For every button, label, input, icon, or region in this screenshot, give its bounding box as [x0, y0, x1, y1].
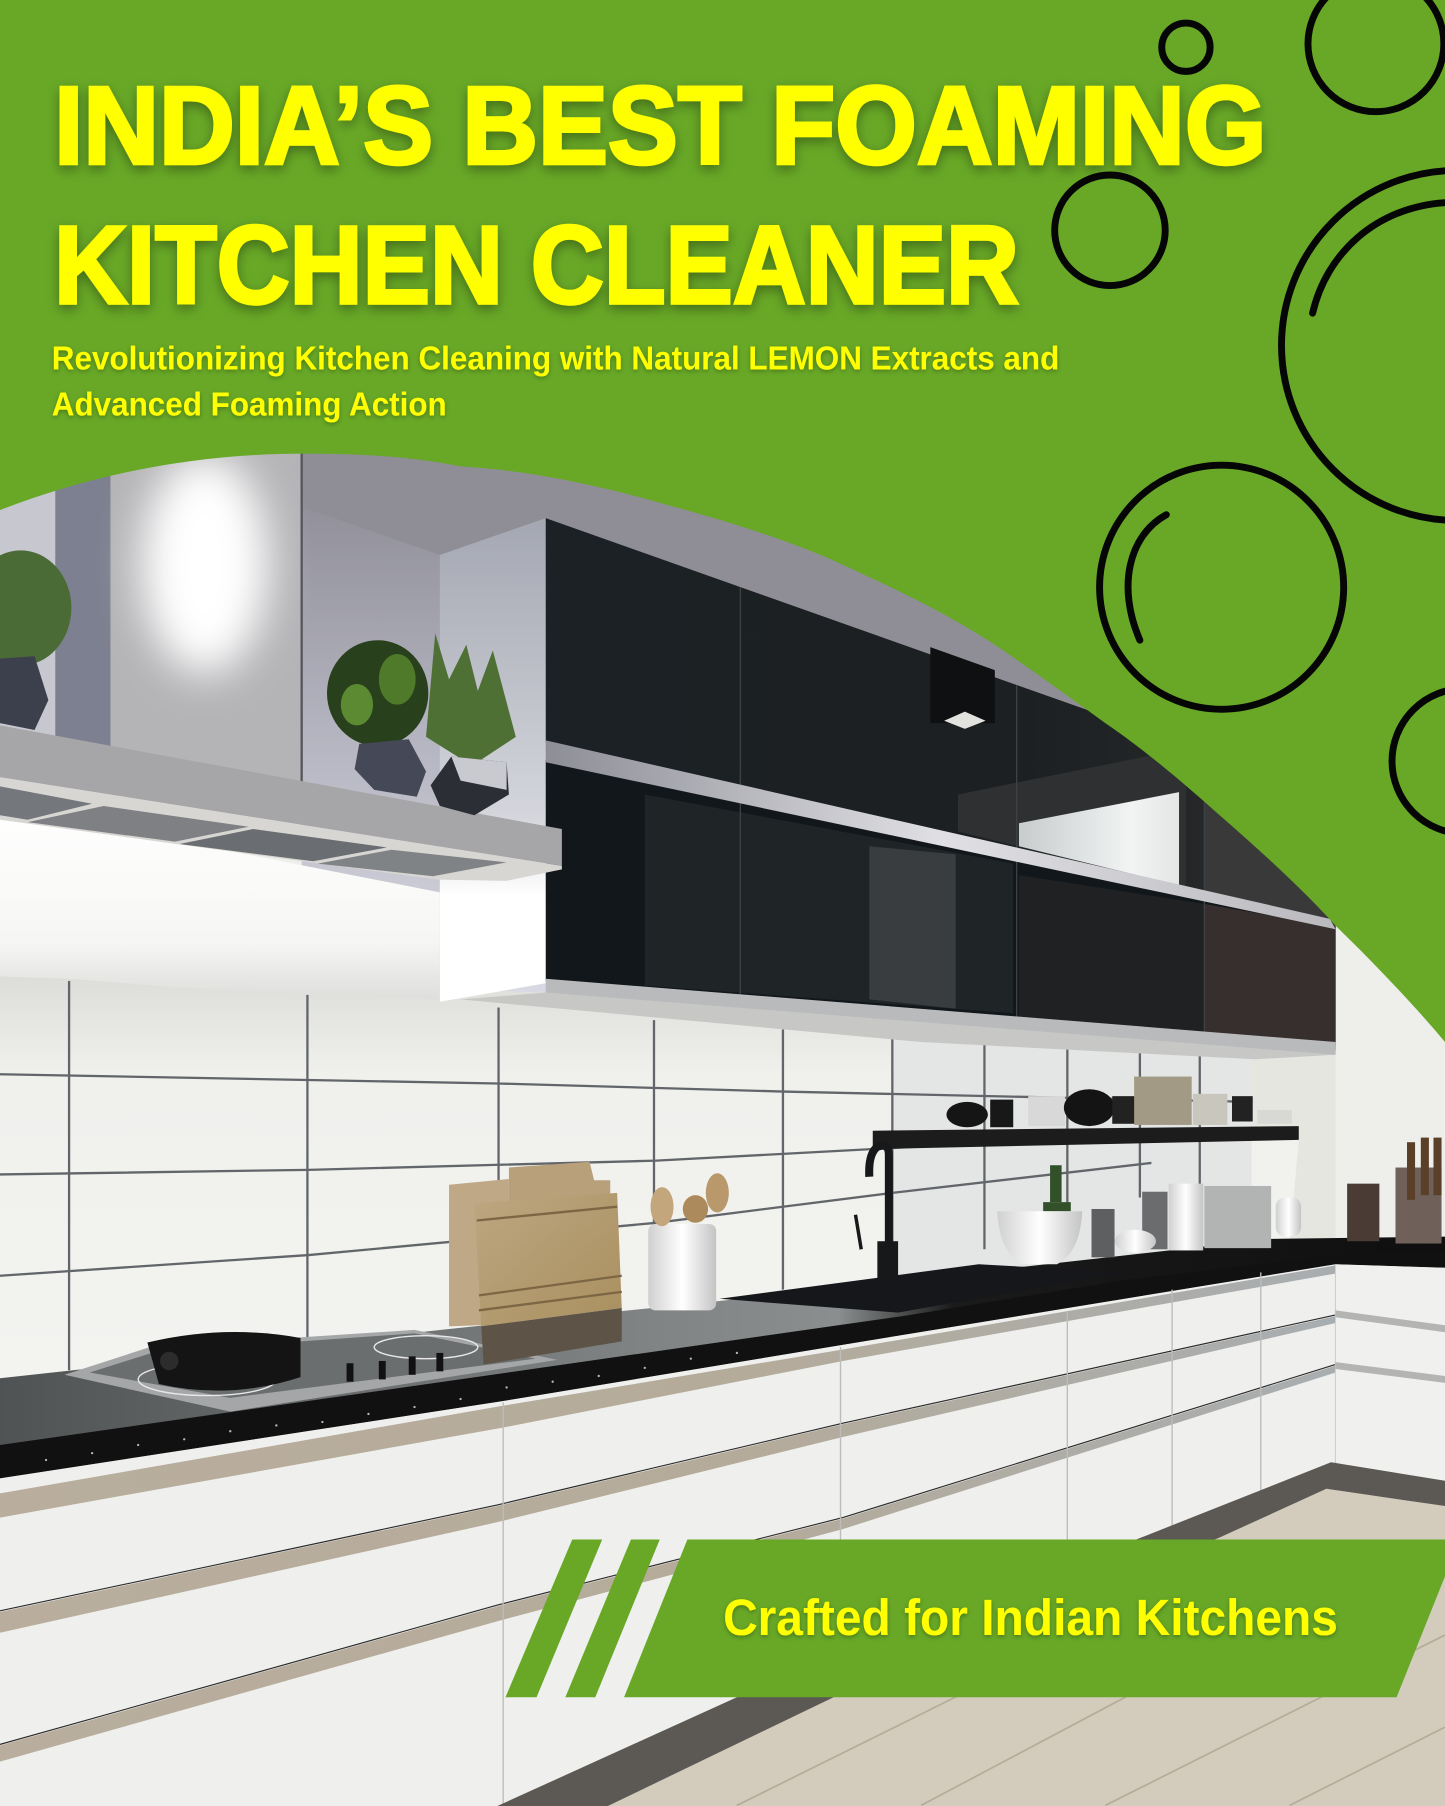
- title: KITCHEN CLEANER: [54, 204, 1019, 327]
- backsplash tiles: [0, 974, 1336, 1378]
- open shelf with dishes: [873, 1077, 1299, 1149]
- under-shelf glow wall: [0, 806, 440, 999]
- banner text: Crafted for Indian Kitchens: [723, 1589, 1338, 1646]
- right edge bubble: [1392, 689, 1445, 834]
- upper wall: [0, 438, 1267, 1013]
- upper cabinet side: [440, 518, 546, 1002]
- sink and faucet: [720, 1146, 1123, 1313]
- title: INDIA’S BEST FOAMING: [54, 65, 1267, 188]
- subtitle: Revolutionizing Kitchen Cleaning with Natural LEMON Extracts and: [52, 341, 1059, 378]
- large right bubble: [1282, 170, 1445, 520]
- banner: [624, 1539, 1445, 1697]
- lower bubble with highlight: [1100, 465, 1344, 709]
- plants on shelf: [327, 633, 516, 815]
- subtitle: [52, 341, 1059, 424]
- countertop: [0, 1237, 1445, 1478]
- medium bubble: [1055, 175, 1165, 286]
- plant left: [0, 550, 71, 730]
- green header shape: [0, 0, 1445, 1042]
- floor and baseboard: [497, 1462, 1445, 1806]
- subtitle: Advanced Foaming Action: [52, 387, 447, 424]
- range hood shelf: [0, 725, 562, 881]
- right return cabinets: [1336, 1264, 1445, 1481]
- cutting boards: [449, 1162, 622, 1364]
- utensil jar: [648, 1173, 729, 1310]
- lower cabinets: [0, 1264, 1336, 1805]
- small top bubble: [1162, 23, 1210, 71]
- top right bubble: [1308, 0, 1444, 112]
- counter crockery: [997, 1138, 1442, 1264]
- glossy black cabinets: [461, 518, 1336, 1059]
- bubbles: [1055, 0, 1445, 834]
- induction hob and pot: [64, 1330, 557, 1412]
- title: [54, 65, 1267, 327]
- banner stripes: [505, 1539, 660, 1697]
